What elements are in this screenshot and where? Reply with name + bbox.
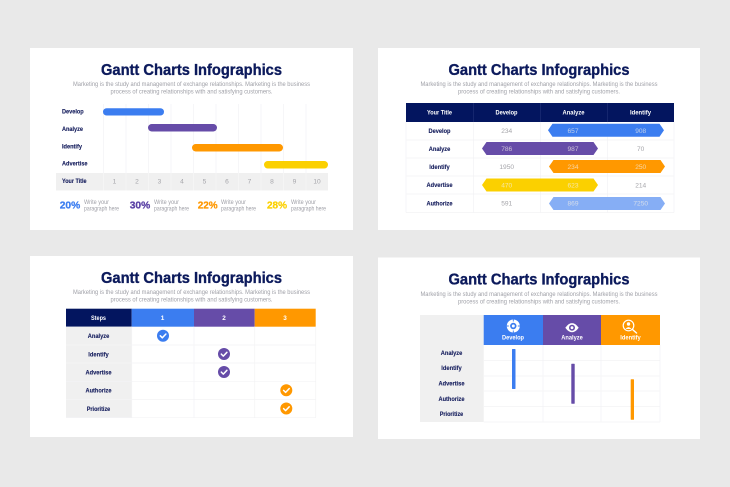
icon: orange check, prioritize xyxy=(280,402,292,414)
gantt bars xyxy=(103,108,328,168)
table values: 470 xyxy=(501,182,513,190)
row label column xyxy=(66,327,132,418)
row labels: Prioritize xyxy=(440,411,464,418)
stat: 30%: Write your xyxy=(154,200,179,206)
panel: vertical gantt chart xyxy=(378,258,700,439)
row labels: Develop xyxy=(62,109,84,116)
row labels: Analyze xyxy=(441,350,463,357)
panel: arrow table gantt chart xyxy=(378,48,700,230)
axis band: 4 xyxy=(180,178,184,186)
axis band: 5 xyxy=(203,178,207,186)
row labels xyxy=(426,128,453,208)
table header: 3 xyxy=(283,315,287,322)
subtitle xyxy=(73,289,310,304)
row labels: Advertise xyxy=(86,370,112,376)
row labels: Advertise xyxy=(438,380,465,388)
subtitle: process of creating relationships with and satisfying customers. xyxy=(458,298,620,305)
row labels: Advertise xyxy=(426,182,453,189)
stat: 22% xyxy=(198,200,257,212)
row labels: Advertise xyxy=(62,161,88,168)
stat: 22%: paragraph here xyxy=(221,206,257,212)
row labels xyxy=(62,109,88,168)
axis band: 10 xyxy=(313,178,321,186)
column header: develop xyxy=(484,315,543,345)
table values: 591 xyxy=(501,201,513,208)
title: Gantt Charts Infographics xyxy=(101,62,282,79)
row labels: Identify xyxy=(62,144,82,150)
row labels: Authorize xyxy=(438,396,465,403)
title: Gantt Charts Infographics xyxy=(101,270,282,287)
table values: 908 xyxy=(635,128,647,135)
subtitle: Marketing is the study and management of exchange relationships. Marketing is the business xyxy=(73,289,310,296)
table values: 623 xyxy=(567,182,579,190)
axis band: Your Title xyxy=(62,178,87,185)
stat: 28%: paragraph here xyxy=(291,206,327,212)
table values: 234 xyxy=(567,164,579,171)
axis band: 2 xyxy=(135,178,139,186)
arrow bars xyxy=(482,124,665,210)
row label column xyxy=(420,315,484,422)
stat: 28%: Write your xyxy=(291,200,316,206)
subtitle: Marketing is the study and management of exchange relationships. Marketing is the business xyxy=(73,81,310,88)
stat: 20%: Write your xyxy=(84,200,109,206)
table values: 214 xyxy=(635,182,647,190)
subtitle: process of creating relationships with and satisfying customers. xyxy=(458,89,620,96)
row labels: Prioritize xyxy=(87,406,111,413)
table values: 234 xyxy=(501,128,513,135)
icon: blue check xyxy=(157,330,169,342)
column header: analyze xyxy=(543,315,601,345)
row labels xyxy=(86,333,112,413)
table values: 987 xyxy=(567,146,579,153)
table values: 869 xyxy=(567,201,579,208)
panel: checkmark steps table xyxy=(30,256,353,437)
subtitle: Marketing is the study and management of exchange relationships. Marketing is the business xyxy=(420,291,658,298)
subtitle xyxy=(73,81,310,96)
table header xyxy=(66,309,316,327)
subtitle: Marketing is the study and management of exchange relationships. Marketing is the business xyxy=(420,81,658,88)
row labels: Identify xyxy=(441,365,462,372)
table header: 1 xyxy=(161,315,165,322)
row labels: Analyze xyxy=(62,126,83,133)
row labels: Develop xyxy=(428,128,451,135)
row labels: Identify xyxy=(429,164,450,171)
table values: 1950 xyxy=(499,164,514,171)
subtitle xyxy=(420,81,658,96)
table values: 786 xyxy=(501,146,513,153)
row labels: Analyze xyxy=(429,146,451,153)
title: Gantt Charts Infographics xyxy=(448,272,630,289)
stat: 22%: Write your xyxy=(221,200,246,206)
icon: purple check, identify xyxy=(218,348,230,360)
panel: timeline gantt chart xyxy=(30,48,353,230)
axis band: 7 xyxy=(248,178,252,186)
stat: 30%: paragraph here xyxy=(154,206,190,212)
subtitle: process of creating relationships with and satisfying customers. xyxy=(110,89,273,96)
row labels: Analyze xyxy=(88,333,110,340)
table values: 70 xyxy=(637,146,645,153)
axis band: 1 xyxy=(113,178,117,186)
subtitle: process of creating relationships with and satisfying customers. xyxy=(110,297,273,304)
title: Gantt Charts Infographics xyxy=(448,62,630,79)
row labels: Identify xyxy=(88,351,109,358)
column header: identify: Identify xyxy=(620,334,641,341)
table header xyxy=(406,103,674,122)
subtitle xyxy=(420,291,658,305)
stat: 28% xyxy=(267,200,327,212)
vertical gantt bars xyxy=(512,349,634,420)
stat: 20% xyxy=(60,200,120,212)
table header: Identify xyxy=(630,110,651,117)
icon: purple check, advertise xyxy=(218,366,230,378)
table values: 657 xyxy=(567,128,579,135)
stat: 30%: 30% xyxy=(130,200,151,212)
row labels: Authorize xyxy=(426,200,453,208)
table header: Develop xyxy=(496,110,518,117)
stat: 20%: paragraph here xyxy=(84,206,120,212)
axis band: 3 xyxy=(158,178,162,186)
table values: 7250 xyxy=(633,201,648,208)
icon: eye xyxy=(565,323,579,332)
stat: 22%: 22% xyxy=(198,200,218,212)
table header: Analyze xyxy=(562,110,585,117)
row labels xyxy=(438,350,465,418)
column header: develop: Develop xyxy=(502,334,524,341)
column header: analyze: Analyze xyxy=(561,334,583,341)
axis band: 9 xyxy=(293,178,297,186)
axis band: 6 xyxy=(225,178,229,186)
row labels: Authorize xyxy=(86,388,112,395)
column header: identify xyxy=(601,315,660,345)
axis band xyxy=(56,173,328,190)
table header: Steps xyxy=(91,315,106,322)
stat: 30% xyxy=(130,200,190,212)
table header: Your Title xyxy=(427,110,452,117)
icon: orange check, authorize xyxy=(280,384,292,396)
table values xyxy=(499,128,648,208)
axis band: 8 xyxy=(270,178,274,186)
stat: 20%: 20% xyxy=(60,200,81,212)
stat: 28%: 28% xyxy=(267,200,288,212)
table values: 250 xyxy=(635,164,647,171)
table header: 2 xyxy=(222,315,226,322)
icon: magnifier with person xyxy=(623,320,636,333)
icon: gear xyxy=(507,320,520,332)
